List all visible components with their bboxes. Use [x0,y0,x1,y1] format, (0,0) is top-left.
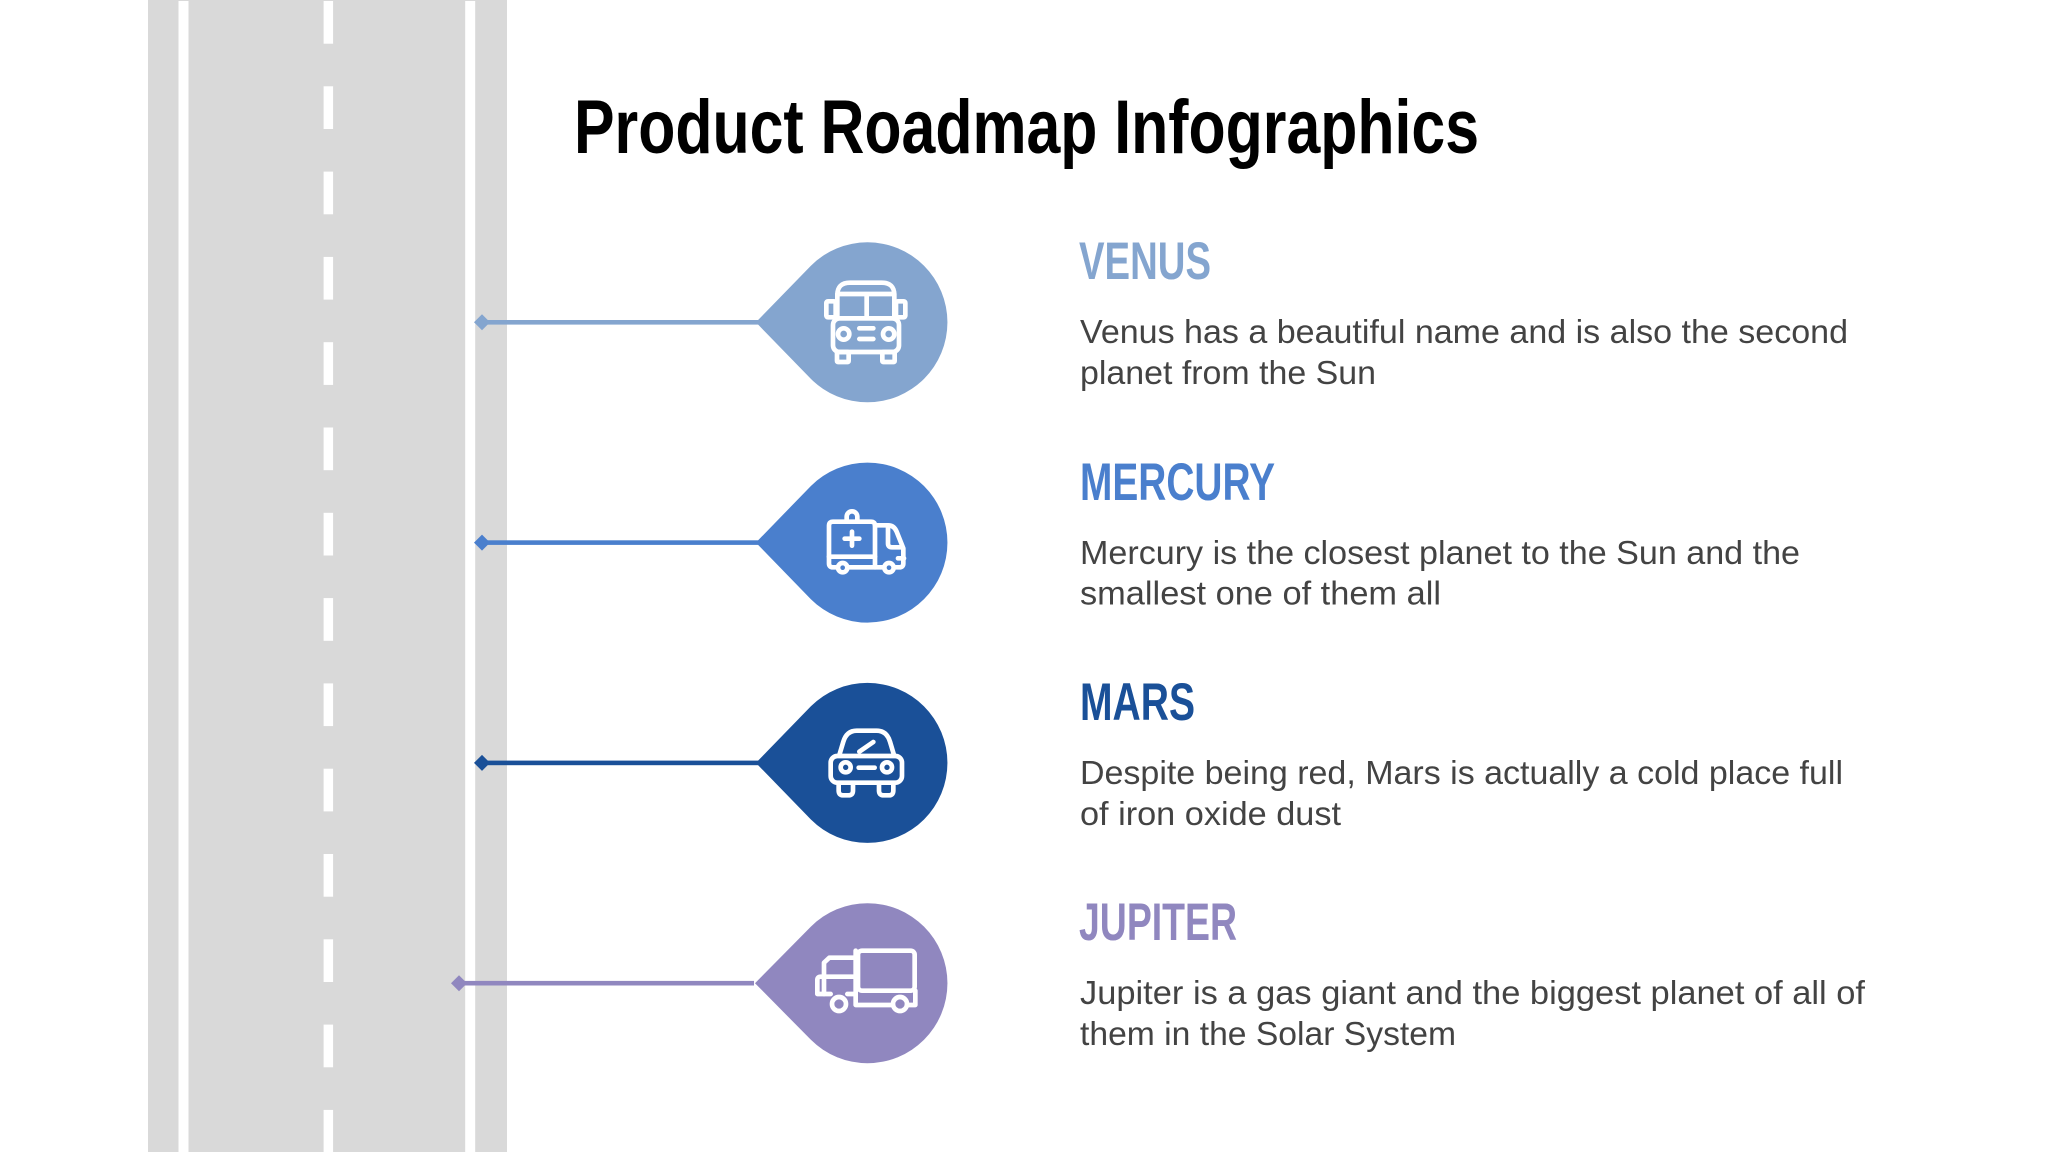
road [148,0,507,1152]
heading: Mercury: MERCURY [1080,453,1275,512]
description: Mercury: smallest one of them all [1080,574,1441,612]
pin: Mercury [756,463,947,623]
connector line: Mars [474,755,762,771]
description: Mars: Despite being red, Mars is actually a cold place full [1080,754,1843,791]
description: Mars: of iron oxide dust [1080,795,1341,832]
icon: car [831,731,902,795]
icon: ambulance [829,511,904,572]
description: Mercury: Mercury is the closest planet to the Sun and the [1080,534,1800,571]
description: Venus: Venus has a beautiful name and is also the second [1080,313,1848,350]
description: Venus: planet from the Sun [1080,354,1376,391]
title: Product Roadmap Infographics [574,85,1479,170]
pin: Venus [756,242,947,402]
heading: Jupiter: JUPITER [1079,893,1237,952]
heading: Mars: MARS [1080,673,1195,732]
item: Mercury [474,453,1800,623]
heading: Venus: VENUS [1079,232,1211,291]
icon: truck [817,951,915,1011]
item: Venus [474,232,1848,402]
icon: school bus [826,283,905,362]
connector line: Jupiter [451,975,754,991]
item: Mars [474,673,1843,843]
connector line: Mercury [474,535,762,551]
item: Jupiter [451,893,1866,1063]
description: Jupiter: them in the Solar System [1080,1015,1456,1052]
pin: Jupiter [755,903,947,1063]
pin: Mars [756,683,947,843]
description: Jupiter: Jupiter is a gas giant and the biggest planet of all of [1080,974,1866,1011]
connector line: Venus [474,314,762,330]
